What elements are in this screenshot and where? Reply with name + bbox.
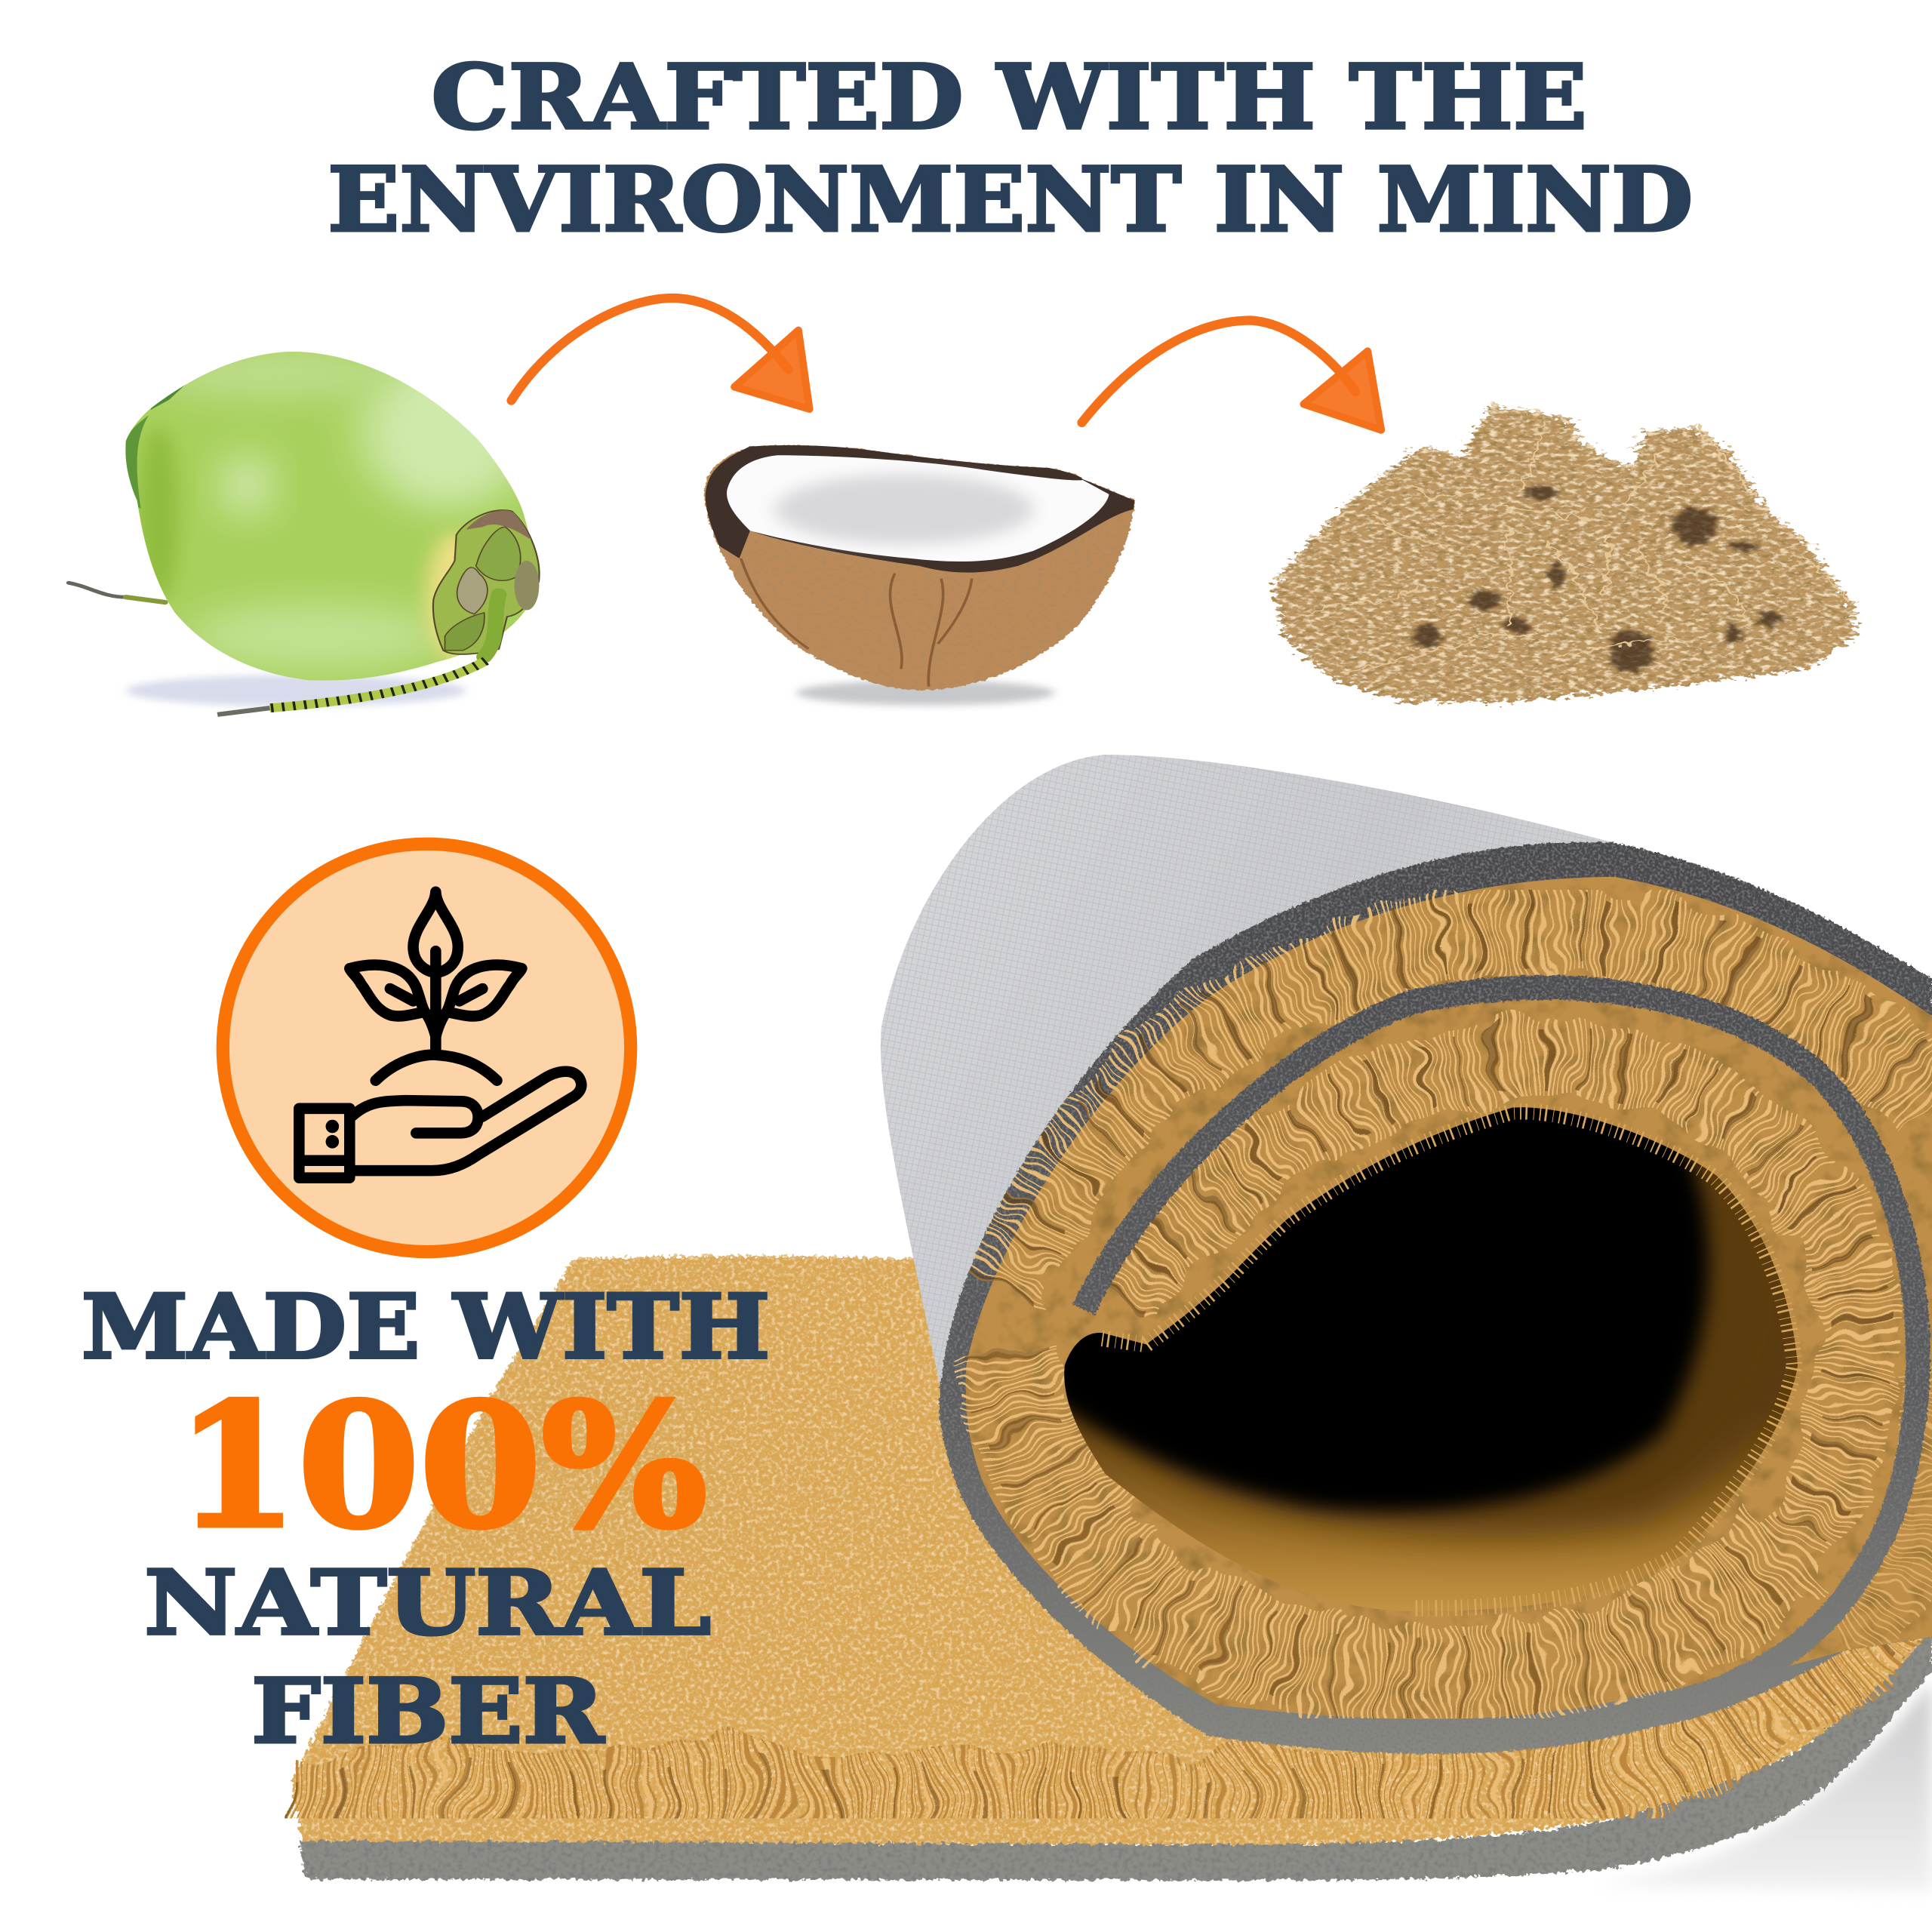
flat coir mat [292,1256,1932,1880]
flap bristle edge [1102,1112,1795,1608]
coconut flesh [727,455,1109,561]
arrow: coconut to shell [512,298,810,409]
text: 100%: 100% [176,1366,707,1566]
icon: halved coconut [704,445,1135,706]
icon: coconut fibre pile [1272,405,1857,702]
inner dark cavity [1064,1107,1798,1611]
roll rim [939,842,1932,1754]
coconut shell [704,445,1135,691]
coconut left stem [69,583,165,602]
arrow: shell to fibre [1081,320,1381,430]
inner coil rubber edge [1084,988,1918,1737]
text: made with 100% natural fiber [82,1275,770,1764]
floor shadow [1589,1682,1932,1891]
mat rubber backing [300,1626,1932,1880]
text: natural: NATURAL [144,1551,711,1655]
title [328,45,1693,251]
icon: green coconut [69,345,551,715]
title: CRAFTED WITH THE [431,45,1587,149]
coconut dark rim [706,445,1134,573]
coconut husk [125,352,529,681]
icon: sprout and hand [299,892,581,1178]
coconut tail [217,595,499,715]
rolled coir mat [881,755,1932,1754]
coconut crown [433,510,540,654]
text: made with: MADE WITH [82,1275,770,1379]
dark gaps in pile [1414,487,1781,672]
roll rubber back [881,755,1614,1399]
mat bristle fringe [296,1564,1932,1806]
title: ENVIRONMENT IN MIND [328,147,1693,251]
loose fibre strands [1316,420,1849,674]
badge: hand holding sprout [223,844,631,1252]
coir fibres [966,877,1932,1719]
text: fiber: FIBER [251,1660,605,1764]
